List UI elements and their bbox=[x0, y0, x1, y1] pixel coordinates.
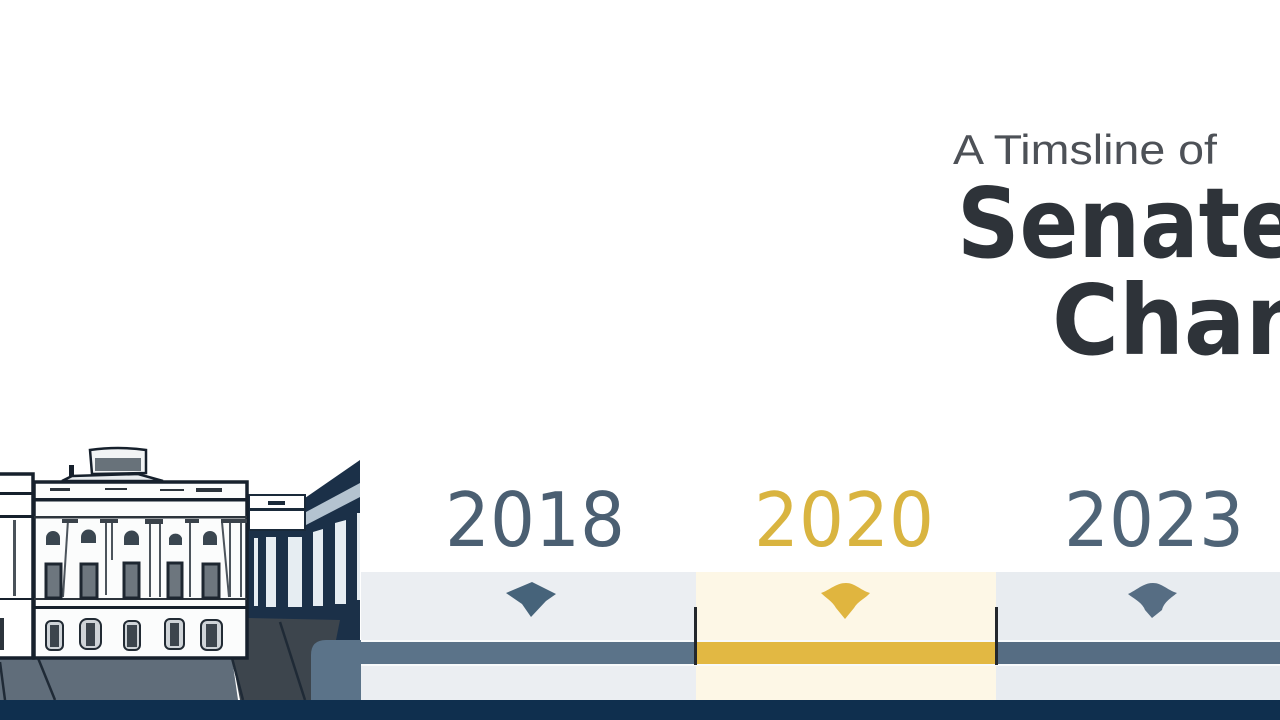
right wing: light band bbox=[306, 483, 360, 525]
columns bbox=[63, 520, 241, 597]
marker: 2023 bbox=[1128, 583, 1177, 618]
roof cupola bbox=[62, 448, 163, 481]
timeline bar highlight bbox=[361, 640, 1280, 666]
year 2020: 2020 bbox=[754, 476, 934, 564]
panel: 2018 bbox=[361, 572, 696, 700]
panel: 2023 bbox=[996, 572, 1280, 700]
illustration: capitol building bbox=[0, 448, 361, 700]
year 2018: 2018 bbox=[445, 476, 625, 564]
right wing: windows bbox=[254, 513, 360, 607]
timeline bar: 2018 bbox=[361, 642, 695, 664]
timeline bar: 2020 bbox=[696, 642, 996, 664]
rounded base block bbox=[311, 640, 361, 700]
footer bar bbox=[0, 700, 1280, 720]
title: kicker line: A Timsline of bbox=[953, 126, 1217, 173]
timeline bar: 2023 bbox=[996, 642, 1280, 664]
ground: gray steps bbox=[0, 658, 238, 700]
marker: 2020 bbox=[821, 583, 870, 619]
tick: 2018 to 2020 bbox=[694, 607, 697, 665]
column capitals bbox=[62, 519, 247, 524]
right wing: dark mass bbox=[247, 460, 360, 660]
year labels bbox=[445, 476, 1244, 564]
panel: 2020 bbox=[696, 572, 996, 700]
lower windows bbox=[46, 619, 222, 650]
tick: 2020 to 2023 bbox=[995, 607, 998, 665]
year 2023: 2023 bbox=[1064, 476, 1244, 564]
timeline band bbox=[361, 572, 1280, 700]
right wing: upper white block bbox=[249, 495, 305, 530]
title block bbox=[953, 126, 1280, 377]
main block bbox=[34, 482, 247, 658]
arched upper windows bbox=[46, 530, 217, 545]
middle windows bbox=[46, 563, 219, 598]
left block bbox=[0, 474, 33, 658]
marker: 2018 bbox=[506, 582, 556, 617]
ground: dark plaza bbox=[232, 618, 340, 700]
cornice details bbox=[50, 488, 222, 492]
ground: diagonal lines bbox=[0, 622, 305, 700]
lower window centres bbox=[50, 623, 217, 647]
